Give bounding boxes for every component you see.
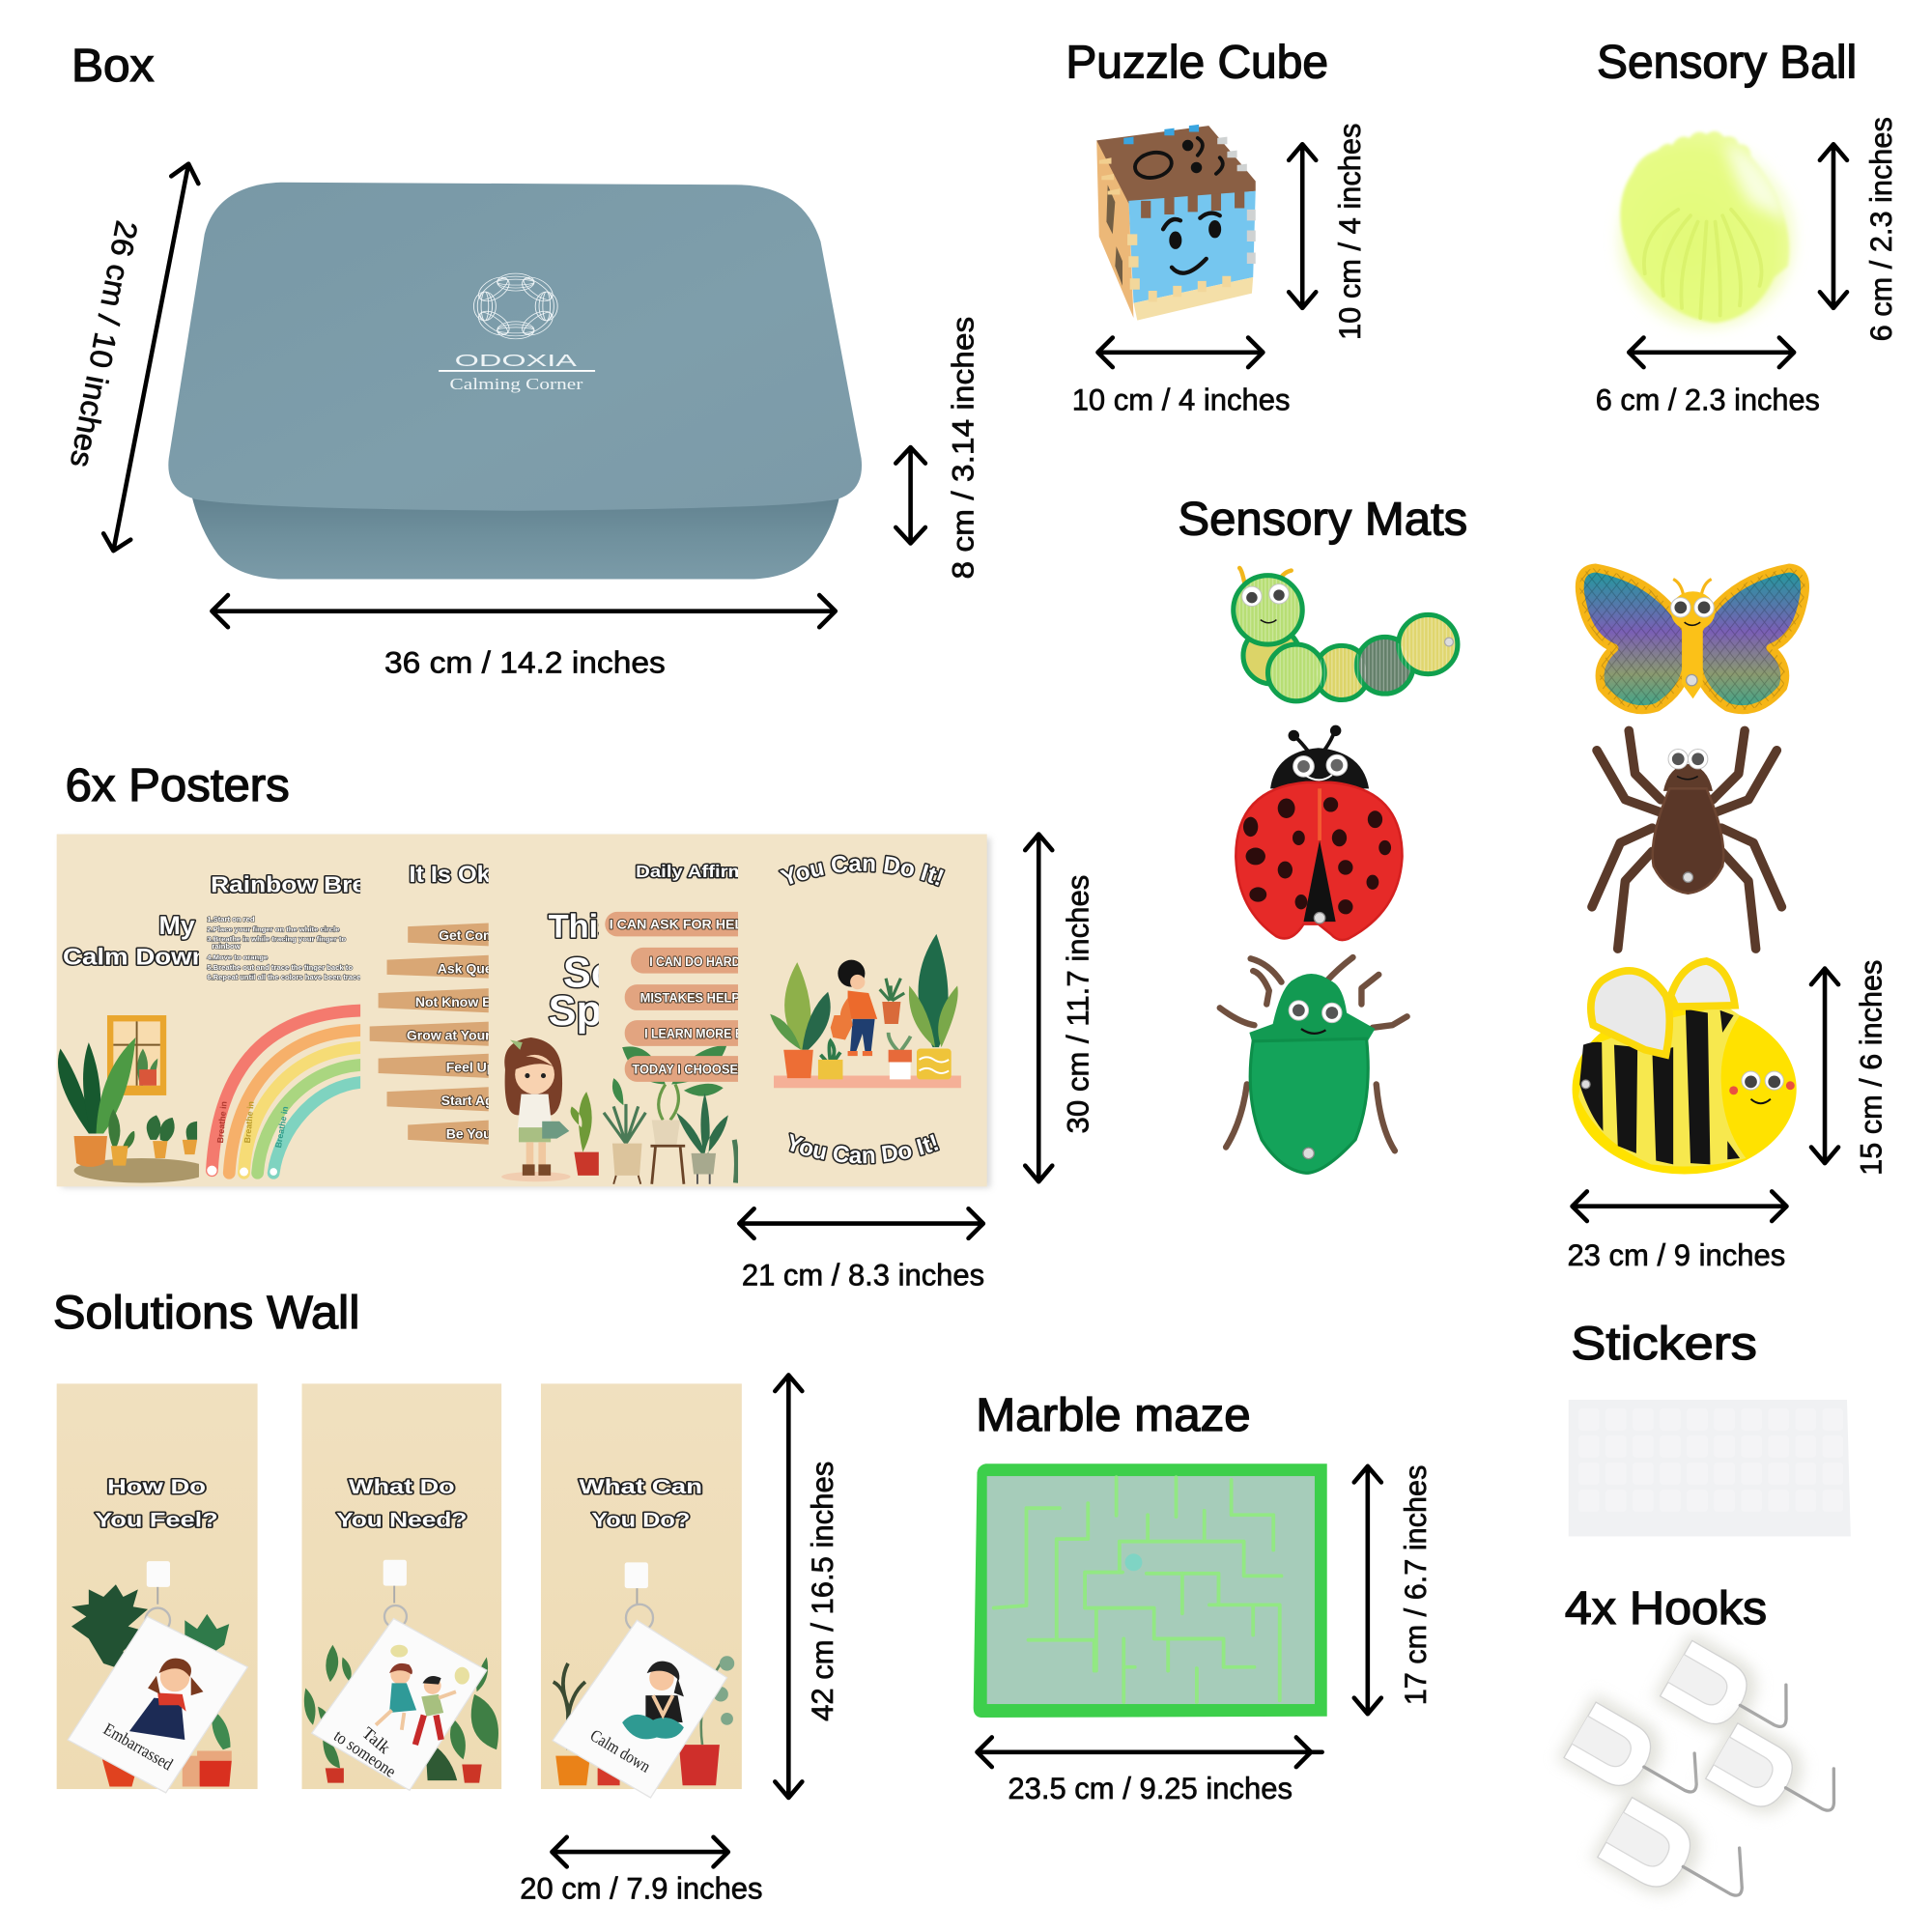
label: maze height: 17 cm / 6.7 inches [1398, 1465, 1433, 1705]
poster 3: it is ok: Start Again [441, 1093, 513, 1108]
label: width: 36 cm / 14.2 inches [384, 644, 666, 679]
illustration: plants on stand [604, 1045, 736, 1184]
mat: bee [1573, 961, 1797, 1175]
poster 3: it is ok: Grow at Your Pace [407, 1028, 526, 1043]
poster 3: it is ok: Be You [446, 1126, 492, 1142]
section: sensory mats [1178, 494, 1889, 1272]
poster 5: daily affirmations: TODAY I CHOOSE [632, 1062, 738, 1077]
poster 4: this is my special space: This [549, 909, 616, 946]
logo: odoxia ring [473, 272, 558, 339]
heading: 4x Hooks: 4x Hooks [1565, 1582, 1767, 1634]
arrow: cube height [1289, 144, 1316, 308]
mat: caterpillar [1234, 568, 1458, 701]
label: poster height: 30 cm / 11.7 inches [1060, 875, 1094, 1133]
panel: how do you feel: You Feel? [95, 1507, 218, 1531]
poster 2: rainbow breathing: Rainbow Breathing [211, 871, 442, 896]
poster 2: rainbow breathing: 4.Move to orange [207, 953, 268, 962]
heading: Sensory Mats: Sensory Mats [1178, 494, 1467, 546]
section: solutions wall [53, 1287, 839, 1906]
section: stickers [1569, 1318, 1851, 1537]
arrow: poster height [1025, 835, 1052, 1181]
arrow: width [212, 595, 836, 627]
product: foam cube [1096, 125, 1256, 321]
flash card: embarrassed [68, 1616, 247, 1793]
arrow: bee height [1811, 969, 1838, 1163]
poster 2: rainbow breathing: rainbow [212, 942, 241, 951]
product: ball [1620, 131, 1793, 327]
section: puzzle cube [1065, 36, 1367, 417]
mat: green beetle [1220, 957, 1407, 1173]
arrow: poster width [739, 1208, 983, 1238]
rainbow labels [215, 1101, 290, 1149]
heading: Box: Box [71, 40, 154, 92]
poster 5: daily affirmations: I LEARN MORE E [644, 1026, 743, 1041]
hook 1 [1654, 1631, 1803, 1761]
rainbow labels: Breathe in [215, 1101, 229, 1144]
section: box [64, 40, 980, 679]
label: height: 8 cm / 3.14 inches [946, 317, 980, 579]
icon: cube smiling face [1163, 213, 1220, 273]
poster 2: rainbow breathing: 1.Start on red [207, 915, 255, 923]
heading: Solutions Wall: Solutions Wall [53, 1287, 359, 1339]
illustration: plant pot [571, 1092, 599, 1176]
poster sheet background [57, 835, 987, 1186]
poster 5: daily affirmations: MISTAKES HELP [640, 990, 740, 1006]
label: depth: 26 cm / 10 inches [64, 218, 145, 470]
mat: ladybug [1236, 725, 1403, 940]
rainbow labels: Breathe in [273, 1105, 290, 1149]
label: cube width: 10 cm / 4 inches [1072, 383, 1290, 417]
poster 1: my calm down: My [159, 911, 195, 940]
arrow: cube width [1097, 337, 1263, 367]
illustration: right plants [880, 934, 958, 1079]
poster 2: rainbow breathing: 2.Place your finger on the white circle [207, 924, 339, 933]
panel: how do you feel: How Do [107, 1474, 206, 1498]
plants [554, 1656, 734, 1785]
heading: Puzzle Cube: Puzzle Cube [1065, 36, 1328, 88]
label: wall width: 20 cm / 7.9 inches [520, 1871, 763, 1906]
arrow: ball height [1820, 144, 1847, 308]
poster 2: rainbow breathing: 6.Repeat until all the colors have been traced [207, 973, 366, 981]
arrow: wall height [775, 1375, 802, 1798]
heading: Sensory Ball: Sensory Ball [1597, 36, 1857, 88]
heading: Marble maze: Marble maze [976, 1389, 1251, 1441]
label: ball width: 6 cm / 2.3 inches [1596, 383, 1820, 417]
poster 3: it is ok: Not Know Everything [415, 994, 553, 1009]
section: hooks [1557, 1582, 1850, 1932]
icon: cube top face [1133, 138, 1223, 181]
section: posters [56, 759, 1094, 1292]
section: sensory ball [1596, 36, 1898, 417]
arrow: maze width [977, 1737, 1322, 1767]
poster 2: rainbow breathing: 3.Breathe in while tracing your finger to [207, 934, 347, 943]
panel: what do you need: What Do [349, 1474, 455, 1498]
flash card: calm down: Calm down [587, 1725, 654, 1776]
flash card: calm down [553, 1620, 727, 1798]
section: marble maze [974, 1389, 1433, 1805]
flash card: talk to someone: Talk [358, 1723, 394, 1757]
product: sticker sheet [1569, 1400, 1851, 1537]
panel: what do you need [301, 1383, 501, 1790]
panel: what can you do: What Can [579, 1474, 702, 1498]
poster 2: rainbow breathing [206, 874, 361, 1179]
poster 6: you can do it: You Can Do It! [778, 854, 945, 887]
poster 3: it is ok: Feel Upset [446, 1060, 515, 1075]
label: bee width: 23 cm / 9 inches [1567, 1237, 1785, 1272]
poster 4: this is my special space: Sp [549, 988, 602, 1035]
hook 4 [1591, 1786, 1760, 1932]
maze walls [994, 1477, 1282, 1702]
poster 3: it is ok: It Is Okay [409, 862, 518, 888]
poster 3: it is ok [369, 864, 489, 1145]
panel: what can you do [541, 1383, 742, 1798]
product: storage box [168, 183, 862, 579]
label: wall height: 42 cm / 16.5 inches [805, 1462, 839, 1721]
arrow: depth [103, 164, 198, 551]
poster 6: you can do it: You Can Do It! [788, 1132, 940, 1165]
flash card: embarrassed: Embarrassed [100, 1719, 176, 1774]
arrow: maze height [1354, 1466, 1381, 1714]
plants [304, 1645, 498, 1783]
hook 2 [1557, 1693, 1712, 1827]
arrow: wall width [552, 1837, 728, 1866]
panel: how do you feel [57, 1383, 258, 1793]
poster 5: daily affirmations [603, 864, 738, 1184]
arrow: height [895, 447, 925, 543]
poster 2: rainbow breathing: 5.Breathe out and trace the finger back to [207, 963, 353, 972]
marble [1125, 1553, 1142, 1571]
logo subtitle: Calming Corner [450, 375, 583, 393]
poster 1: my calm down [58, 911, 210, 1182]
plants [71, 1584, 232, 1786]
flash card: talk to someone [312, 1619, 487, 1790]
illustration: girl with watering can [501, 1037, 571, 1181]
poster 5: daily affirmations: I CAN ASK FOR HELP [610, 917, 753, 932]
illustration: left plants [770, 962, 842, 1079]
arrow: bee width [1573, 1191, 1786, 1221]
poster 6: you can do it [770, 854, 961, 1165]
illustration: boy watering [831, 960, 877, 1056]
label: maze width: 23.5 cm / 9.25 inches [1008, 1771, 1293, 1805]
label: bee height: 15 cm / 6 inches [1854, 960, 1889, 1176]
label: poster width: 21 cm / 8.3 inches [742, 1257, 984, 1292]
logo text: ODOXIA [455, 351, 577, 370]
hook 3 [1699, 1713, 1850, 1845]
arrow: ball width [1629, 337, 1794, 367]
label: ball height: 6 cm / 2.3 inches [1863, 117, 1898, 341]
poster 1: my calm down: Calm Down [63, 945, 209, 971]
mat: spider [1592, 730, 1781, 949]
heading: 6x Posters: 6x Posters [66, 759, 290, 811]
mat: butterfly [1579, 568, 1805, 710]
poster 4: this is my special space: So [563, 951, 616, 997]
poster 3: it is ok: Get Comfy [439, 927, 507, 943]
label: cube height: 10 cm / 4 inches [1332, 124, 1367, 340]
flash card: talk to someone: to someone [330, 1725, 400, 1781]
poster 4: this is my special space [501, 912, 599, 1182]
panel: what can you do: You Do? [591, 1507, 690, 1531]
poster 3: it is ok: Ask Questions [438, 961, 532, 977]
heading: Stickers: Stickers [1571, 1318, 1757, 1370]
product: maze mat [974, 1463, 1327, 1718]
poster 5: daily affirmations: I CAN DO HARD [649, 953, 741, 969]
panel: what do you need: You Need? [336, 1507, 467, 1531]
rainbow labels: Breathe in [242, 1101, 256, 1144]
poster 5: daily affirmations: Daily Affirmations [636, 862, 804, 881]
